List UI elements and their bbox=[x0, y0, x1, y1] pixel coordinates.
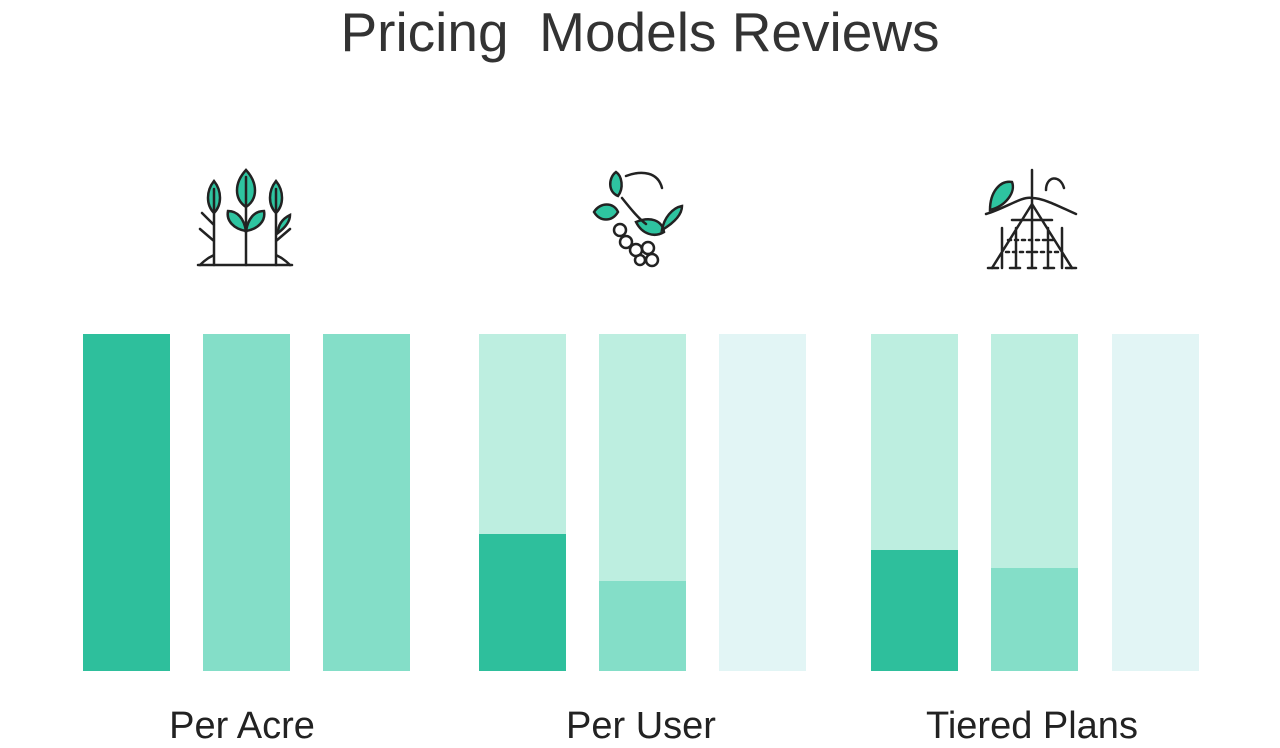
icon: seeds and leaves bbox=[592, 170, 684, 268]
label: Per Acre: Per Acre bbox=[169, 705, 315, 747]
title: Pricing Models Reviews bbox=[340, 1, 940, 63]
icon: irrigation tower bbox=[984, 168, 1078, 270]
label: Per User: Per User bbox=[566, 705, 716, 747]
bar chart: Tiered Plans bbox=[871, 334, 1199, 671]
icon: crop plants bbox=[196, 168, 294, 266]
bar chart: Per User bbox=[479, 334, 806, 671]
label: Tiered Plans: Tiered Plans bbox=[926, 705, 1138, 747]
bar chart: Per Acre bbox=[83, 334, 410, 671]
